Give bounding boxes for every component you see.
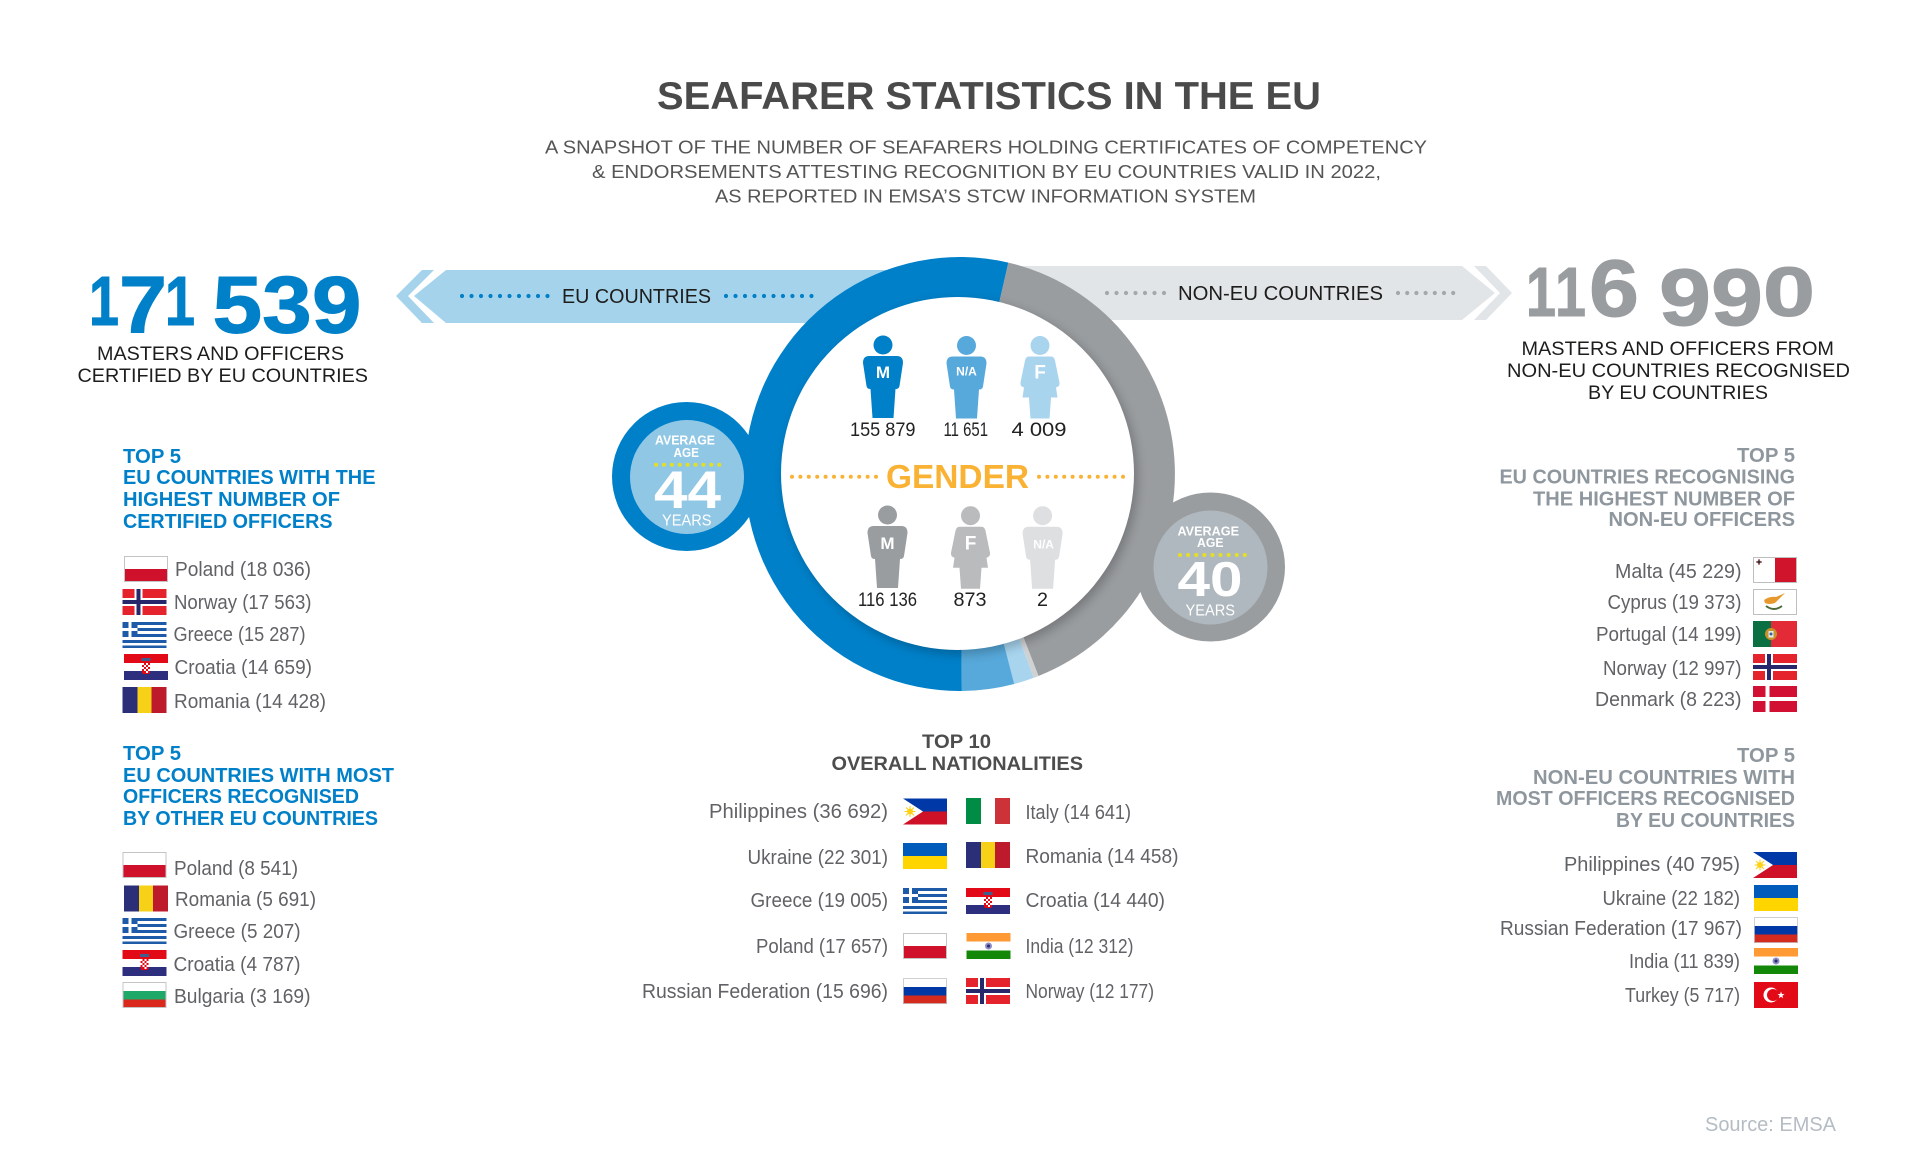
panel: top 5 EU countries most officers recognised xyxy=(122,743,394,1008)
country list: Romania (5 691) xyxy=(175,889,316,911)
big number: non-EU total: 1 xyxy=(1555,253,1586,331)
country list: India (11 839) xyxy=(1629,951,1740,973)
country list: Norway (17 563) xyxy=(174,592,312,614)
icon: EU not available xyxy=(946,336,986,418)
big number: EU total: 1 xyxy=(89,262,119,340)
icon: non-EU not available xyxy=(1023,506,1063,589)
non-EU gender numbers: 873 xyxy=(954,590,986,611)
heading: NON-EU COUNTRIES WITH xyxy=(1533,767,1795,789)
right column: Romania (14 458) xyxy=(1026,846,1178,868)
panel: top 5 EU countries recognising non-EU officers xyxy=(1500,445,1797,712)
EU total caption: CERTIFIED BY EU COUNTRIES xyxy=(78,365,368,387)
country list: Greece (15 287) xyxy=(174,624,306,646)
heading: THE HIGHEST NUMBER OF xyxy=(1533,488,1795,510)
heading: EU COUNTRIES RECOGNISING xyxy=(1500,466,1795,488)
left column: Ukraine (22 301) xyxy=(748,847,888,869)
panel: top 5 non-EU countries most officers recognised xyxy=(1496,745,1798,1008)
EU gender numbers: 4 009 xyxy=(1012,420,1066,441)
heading: TOP 5 xyxy=(1737,445,1795,467)
badge: non-EU average age: 40 xyxy=(1178,553,1242,607)
big number: non-EU total: 99 xyxy=(1659,253,1763,343)
icon: non-EU female xyxy=(951,506,990,589)
badge: non-EU average age: YEARS xyxy=(1186,602,1235,620)
country list: Croatia (4 787) xyxy=(174,954,300,976)
EU gender numbers: 155 879 xyxy=(850,420,916,441)
country list xyxy=(1500,852,1798,1008)
badge: EU average age: 44 xyxy=(654,461,722,520)
big number: EU total: 7 xyxy=(119,260,167,350)
icon: EU female xyxy=(1020,336,1060,418)
right column: India (12 312) xyxy=(1026,936,1134,958)
right column xyxy=(966,798,1178,1004)
country list: Philippines (40 795) xyxy=(1564,854,1740,876)
country list: Croatia (14 659) xyxy=(174,657,312,679)
gender heading: GENDER xyxy=(886,459,1029,496)
right column: Croatia (14 440) xyxy=(1026,890,1165,912)
right column: Norway (12 177) xyxy=(1026,981,1154,1003)
heading: NON-EU OFFICERS xyxy=(1608,509,1795,531)
heading xyxy=(123,446,376,533)
icon: non-EU male xyxy=(868,506,908,588)
badge: non-EU average age: AVERAGE xyxy=(1178,524,1239,538)
subtitle: A SNAPSHOT OF THE NUMBER OF SEAFARERS HOLDING CERTIFICATES OF COMPETENCY xyxy=(545,136,1427,158)
icon: EU male: M xyxy=(876,363,890,382)
heading: EU COUNTRIES WITH THE xyxy=(123,467,376,489)
left column: Poland (17 657) xyxy=(756,936,888,958)
country list: Russian Federation (17 967) xyxy=(1500,918,1742,940)
EU gender numbers: 11 651 xyxy=(944,420,988,441)
non-EU total caption: MASTERS AND OFFICERS FROM xyxy=(1522,338,1834,360)
country list: Greece (5 207) xyxy=(174,921,300,943)
country list: Poland (18 036) xyxy=(175,559,311,581)
country list xyxy=(122,852,316,1008)
badge: EU average age: YEARS xyxy=(662,512,712,530)
panel: non-EU total xyxy=(1507,244,1850,404)
icon: non-EU female: F xyxy=(965,534,976,555)
panel: top 5 EU countries highest certified officers xyxy=(122,446,376,713)
heading xyxy=(123,743,394,830)
left column xyxy=(642,798,947,1004)
big number: EU total: 539 xyxy=(212,260,362,350)
donut chart: gender split xyxy=(745,257,1175,691)
EU total caption: MASTERS AND OFFICERS xyxy=(97,343,344,365)
heading: TOP 10 xyxy=(922,731,991,753)
heading: MOST OFFICERS RECOGNISED xyxy=(1496,788,1795,810)
country list: Romania (14 428) xyxy=(174,691,326,713)
icon: EU female: F xyxy=(1034,362,1046,384)
heading: OVERALL NATIONALITIES xyxy=(832,753,1083,775)
country list: Cyprus (19 373) xyxy=(1608,592,1742,614)
title: SEAFARER STATISTICS IN THE EU xyxy=(657,75,1321,118)
country list: Malta (45 229) xyxy=(1615,561,1742,583)
left column: Philippines (36 692) xyxy=(709,801,888,823)
icon: non-EU male: M xyxy=(880,534,895,553)
non-EU gender numbers: 2 xyxy=(1037,590,1048,611)
EU gender numbers xyxy=(850,420,1066,441)
badge: EU average age xyxy=(612,402,761,551)
country list: Portugal (14 199) xyxy=(1596,624,1742,646)
heading: OFFICERS RECOGNISED xyxy=(123,786,359,808)
banner: non-EU countries arrow: NON-EU COUNTRIES xyxy=(1178,283,1383,305)
heading: CERTIFIED OFFICERS xyxy=(123,511,332,533)
heading: TOP 5 xyxy=(123,743,181,765)
source note: Source: EMSA xyxy=(1705,1114,1837,1136)
non-EU gender numbers: 116 136 xyxy=(858,590,917,611)
subtitle: & ENDORSEMENTS ATTESTING RECOGNITION BY EU COUNTRIES VALID IN 2022, xyxy=(592,161,1381,182)
country list: Norway (12 997) xyxy=(1603,658,1742,680)
heading xyxy=(1496,745,1795,832)
country list xyxy=(122,556,326,713)
non-EU gender numbers xyxy=(858,590,1048,611)
country list xyxy=(1595,557,1797,712)
big number: non-EU total: 1 xyxy=(1526,253,1556,331)
country list: Poland (8 541) xyxy=(174,858,298,880)
heading xyxy=(832,731,1083,775)
country list: Denmark (8 223) xyxy=(1595,689,1742,711)
banner: EU countries arrow: EU COUNTRIES xyxy=(562,286,711,308)
country list: Turkey (5 717) xyxy=(1625,985,1740,1007)
heading xyxy=(1500,445,1795,531)
icon: EU male xyxy=(863,336,903,418)
country list: Ukraine (22 182) xyxy=(1602,888,1740,910)
heading: BY EU COUNTRIES xyxy=(1616,810,1795,832)
heading: TOP 5 xyxy=(123,446,181,468)
subtitle xyxy=(545,136,1427,206)
EU total caption xyxy=(78,343,368,387)
badge: EU average age: AVERAGE xyxy=(655,434,715,448)
banner: non-EU countries arrow xyxy=(1000,266,1512,320)
left column: Greece (19 005) xyxy=(750,890,888,912)
icon: EU not available: N/A xyxy=(956,364,977,378)
non-EU total caption xyxy=(1507,338,1850,404)
heading: EU COUNTRIES WITH MOST xyxy=(123,765,394,787)
badge: non-EU average age xyxy=(1136,492,1285,642)
non-EU total caption: NON-EU COUNTRIES RECOGNISED xyxy=(1507,360,1850,382)
big number: non-EU total: 6 xyxy=(1589,244,1639,334)
big number: non-EU total: 0 xyxy=(1763,253,1815,331)
heading: HIGHEST NUMBER OF xyxy=(123,489,340,511)
heading: BY OTHER EU COUNTRIES xyxy=(123,808,378,830)
banner: EU countries arrow xyxy=(396,270,900,323)
right column: Italy (14 641) xyxy=(1026,802,1131,824)
panel: EU total xyxy=(78,260,368,387)
badge: non-EU average age: AGE xyxy=(1197,536,1224,550)
big number: EU total: 1 xyxy=(165,262,195,340)
non-EU total caption: BY EU COUNTRIES xyxy=(1588,382,1768,404)
heading: TOP 5 xyxy=(1737,745,1795,767)
subtitle: AS REPORTED IN EMSA’S STCW INFORMATION SYSTEM xyxy=(715,186,1256,206)
badge: EU average age: AGE xyxy=(674,446,699,460)
left column: Russian Federation (15 696) xyxy=(642,981,888,1003)
icon: non-EU not available: N/A xyxy=(1033,538,1054,552)
country list: Bulgaria (3 169) xyxy=(174,986,310,1008)
panel: top 10 overall nationalities xyxy=(642,731,1178,1004)
